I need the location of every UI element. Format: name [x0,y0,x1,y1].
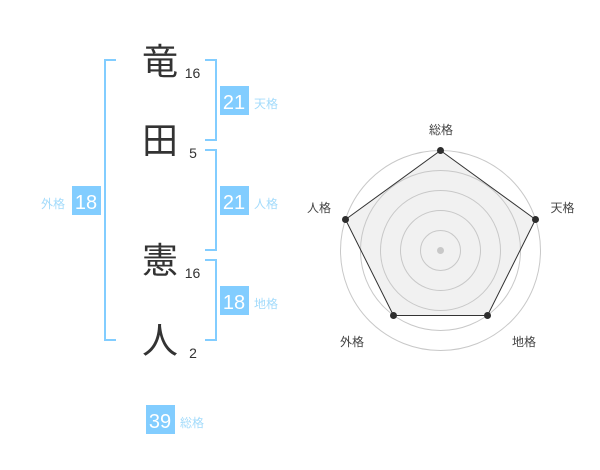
kanji: 憲 with stroke count [142,240,200,281]
badge: 人格 21: 21 [223,192,245,214]
bracket: outer [105,60,116,340]
badge: 天格 21: 21 [223,92,245,114]
radar vertex dots [342,147,539,319]
kanji: 人 with stroke count [142,320,197,361]
bracket: person [205,150,216,250]
radar chart [307,122,575,350]
name diagram [41,41,278,434]
badge: 人格 21: 人格 [254,196,278,211]
bracket: earth [205,260,216,340]
badge: 総格 39: 総格 [180,415,204,430]
radar rings [340,150,540,350]
badge: 地格 18 [220,286,278,315]
kanji: 田 with stroke count: 田 [142,120,178,161]
kanji: 竜 with stroke count [142,41,200,82]
badge: 外格 18: 外格 [41,196,65,211]
kanji: 田 with stroke count: 5 [189,145,197,161]
kanji: 田 with stroke count [142,120,197,161]
badge: 外格 18 [41,186,101,215]
badge: 総格 39: 39 [149,411,171,433]
radar area [346,150,536,316]
badge: 外格 18: 18 [75,192,97,214]
kanji: 竜 with stroke count: 16 [185,65,200,81]
badge: 天格 21: 天格 [254,96,278,111]
kanji: 竜 with stroke count: 竜 [142,41,178,82]
kanji: 人 with stroke count: 人 [142,320,178,361]
badge: 地格 18: 18 [223,292,245,314]
radar center dot [437,247,444,254]
kanji: 憲 with stroke count: 16 [185,265,200,281]
badge: 総格 39 [146,405,204,434]
kanji: 人 with stroke count: 2 [189,345,197,361]
radar outline [346,150,536,316]
badge: 地格 18: 地格 [254,296,278,311]
radar label: 外格: 外格 [340,334,364,349]
radar label: 総格: 総格 [429,122,453,137]
radar label: 天格: 天格 [550,200,575,215]
badge: 人格 21 [220,186,278,215]
kanji: 憲 with stroke count: 憲 [142,240,178,281]
radar label: 地格: 地格 [512,334,536,349]
badge: 天格 21 [220,86,278,115]
bracket: heaven [205,60,216,140]
radar label: 人格: 人格 [307,200,331,215]
